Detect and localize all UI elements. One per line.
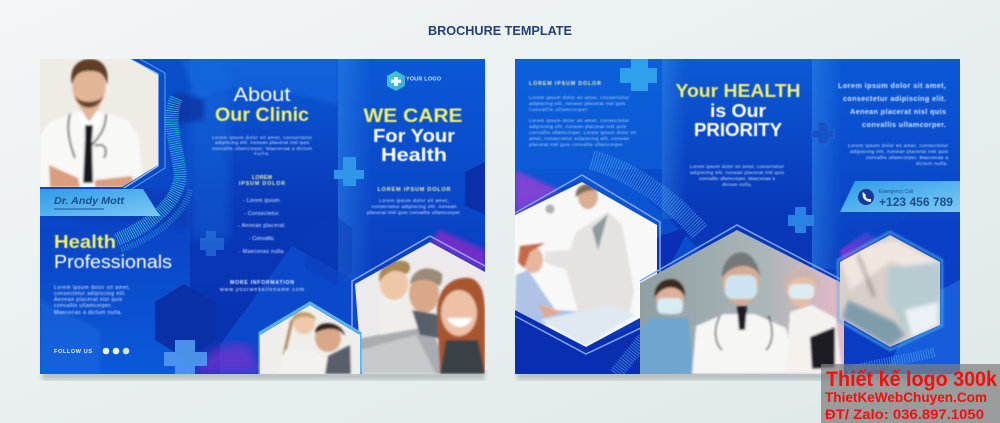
text block: top left: Lorem ipsum dolor sit amet, consectetur [529,95,629,101]
text block: priority intro: dictum nulla. [722,182,752,188]
clinic list [220,175,304,293]
text block: clinic intro: nulla. [254,151,270,157]
text block: left intro: Lorem ipsum dolor sit amet, [54,285,130,291]
text block: top right: dictum nulla. [916,161,948,167]
text block: care intro [367,187,461,216]
watermark: ĐT/ Zalo: 036.897.1050 [825,407,984,422]
text block: priority intro: Lorem ipsum dolor sit amet, consectetur [690,164,784,170]
follow us row: FOLLOW US [54,349,92,355]
heading: we care for your health: WE CARE [364,106,462,127]
text block: top left: amet, consectetur adipiscing elit. Aenean [529,136,629,142]
heading: health professionals: Professionals [54,252,172,272]
text block: top right: Aenean placerat nisl quis [850,107,946,116]
text block: top right: convallis ullamcorper. Maecenas a [866,155,948,161]
band: doctor name: Dr. Andy Mott [54,196,125,207]
text block: left intro: Maecenas a dictum nulla. [54,310,122,316]
clinic list: - Aenean placerat. [238,223,286,229]
text block: left intro: Aenean placerat nisl quis [54,297,122,303]
clinic list: LOREM [252,175,272,181]
heading: health professionals: Health [54,232,116,252]
text block: top left: convallis ullamcorper. [529,107,589,113]
photo: masked doctor [838,232,944,350]
text block: top right [838,81,949,167]
text block: top left: adipiscing elit. Aenean placerat nisl quis [529,124,627,130]
text block: clinic intro: adipiscing elit. Aenean placerat nisl quis [215,140,310,146]
text block: left intro: convallis ullamcorper. [54,303,112,309]
watermark: ThietKeWebChuyen.Com [825,390,987,405]
wave dot pattern [592,160,935,374]
band: doctor name [40,189,160,216]
text block: top left: Lorem ipsum dolor sit amet, consectetur [529,118,629,124]
text block: top left [529,81,637,148]
text block: top left: LOREM IPSUM DOLOR [529,81,601,87]
text block: priority intro: adipiscing elit. Aenean placerat nisl quis [690,170,785,176]
text block: left intro: consectetur adipiscing elit. [54,291,126,297]
text block: care intro: consectetur adipiscing elit. Aenean [372,204,457,210]
text block: top right: Lorem ipsum dolor sit amet, [838,81,946,90]
text block: top right: Lorem ipsum dolor sit amet, consectetur [848,143,948,149]
band: emergency call: +123 456 789 [879,197,953,209]
text block: care intro: Lorem ipsum dolor sit amet, [379,198,449,204]
icon: bottom cross [164,340,207,374]
photo: medical team [636,224,848,376]
photo: father and daughter [258,303,362,375]
text block: top left: convallis ullamcorper. Lorem ipsum dolor sit [529,130,637,136]
heading: we care for your health: For Your [373,125,455,146]
title: BROCHURE TEMPLATE [428,24,572,38]
watermark [821,364,1000,423]
text block: clinic intro: Lorem ipsum dolor sit amet, consectetur [212,135,312,141]
icon: outline cross [812,122,834,144]
text block: priority intro [690,164,785,188]
clinic list: - Maecenas nulla. [239,249,285,255]
band: emergency call [840,181,960,212]
clinic list: IPSUM DOLOR [239,181,285,187]
heading: your health is our priority: Your HEALTH [676,81,800,101]
text block: priority intro: convallis ullamcorper. Maecenas a [699,176,775,182]
text block: clinic intro [212,135,312,157]
text block: top left: placerat nisl quis convallis ullamcorper. [529,142,624,148]
clinic list: www.yourwebsitename.com [220,287,304,293]
heading: your health is our priority [676,81,800,140]
text block: top right: adipiscing elit. Aenean placerat nisl quis [850,149,949,155]
logo [387,71,442,91]
clinic list: MORE INFORMATION [230,280,294,286]
icon: small blue cross [788,207,814,233]
panel: right brochure [515,59,960,380]
panel: left brochure [40,59,485,380]
text block: care intro: placerat nisl quis convallis ullamcorper. [367,210,461,216]
text block: left intro [54,285,130,316]
clinic list: - Convallis. [249,236,275,242]
text block: top right: convallis ullamcorper. [862,120,946,129]
wave dot pattern [116,98,190,250]
heading: health professionals [54,232,172,272]
heading: your health is our priority: PRIORITY [694,120,782,140]
photo: doctor [40,59,160,189]
icon: faint cross [200,231,224,256]
heading: we care for your health: Health [381,144,447,165]
heading: about our clinic: About [234,85,291,106]
icon: middle cross [334,157,364,186]
photo: family [350,236,490,380]
text block: care intro: LOREM IPSUM DOLOR [378,187,451,193]
text block: top left: adipiscing elit. Aenean placerat nisl quis [529,101,626,107]
heading: about our clinic [215,85,309,126]
clinic list: - Lorem ipsum. [243,198,281,204]
heading: about our clinic: Our Clinic [215,105,309,126]
follow us row [54,348,129,355]
text block: clinic intro: convallis ullamcorper. Maecenas a dictum [212,146,312,152]
band: emergency call: Emergency Call [879,189,913,195]
icon: top cross [620,59,657,91]
heading: we care for your health [364,106,462,165]
heading: your health is our priority: is Our [710,101,766,121]
clinic list: - Consectetur. [244,211,280,217]
logo: YOUR LOGO [406,76,442,82]
photo: nurse and patient [515,175,660,354]
text block: top right: consectetur adipiscing elit. [843,94,946,103]
